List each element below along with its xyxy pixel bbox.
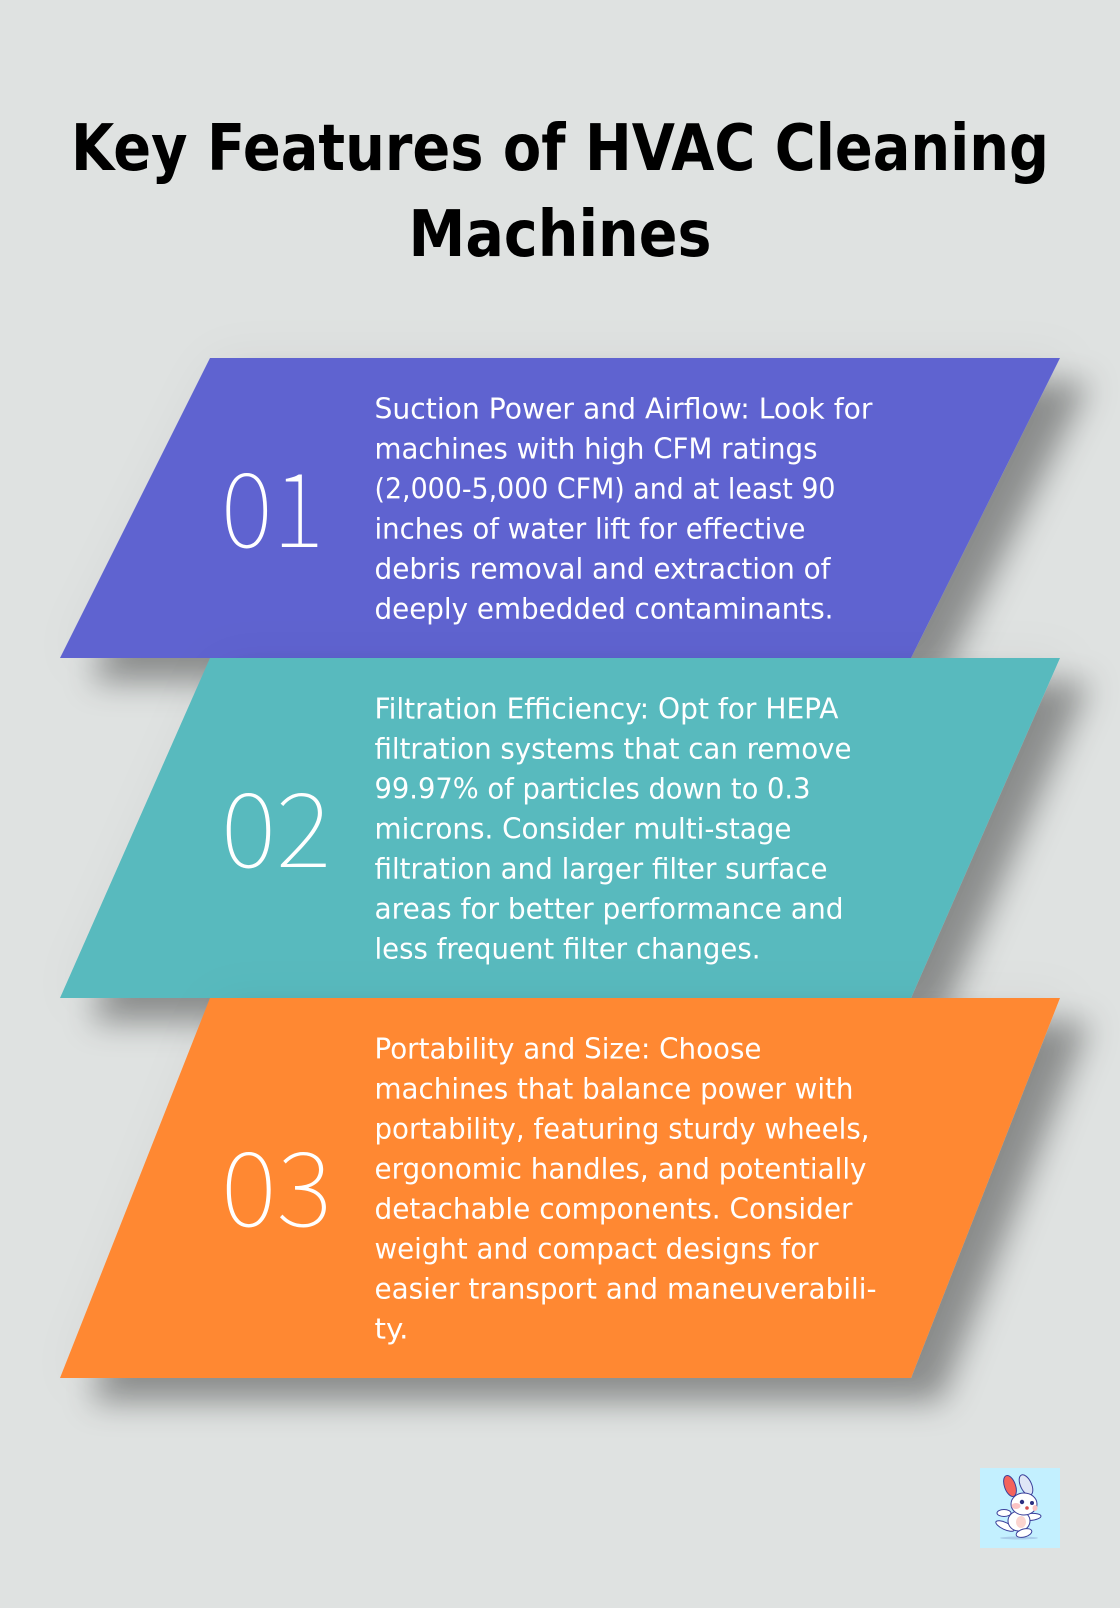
number 03: 03 [221, 1107, 332, 1256]
panel 1 text [374, 392, 873, 626]
title [71, 112, 1049, 272]
panel 1 text: deeply embedded contaminants. [374, 592, 834, 626]
panel 1: suction power and airflow [60, 358, 1060, 658]
panel 3 text [374, 1032, 876, 1346]
number 01: 01 [221, 428, 324, 577]
panel 2 text: 99.97% of particles down to 0.3 [374, 772, 810, 806]
panel 1 text: inches of water lift for effective [374, 512, 806, 546]
panel 1 shape [60, 358, 1060, 658]
panel 2 text: Filtration Efficiency: Opt for HEPA [374, 692, 839, 726]
panel 2 text: less frequent filter changes. [374, 932, 760, 966]
panel 3 text: Portability and Size: Choose [374, 1032, 762, 1066]
panel 3 text: machines that balance power with [374, 1072, 854, 1106]
panel 3 text: detachable components. Consider [374, 1192, 853, 1226]
panel 3: portability and size [60, 998, 1060, 1378]
panel 3 text: ty. [374, 1312, 408, 1346]
number 02: 02 [221, 748, 331, 897]
panel 2 shape [60, 658, 1060, 998]
panel 3 text: ergonomic handles, and potentially [374, 1152, 867, 1186]
panel 2: filtration efficiency [60, 658, 1060, 998]
panel 2 text: microns. Consider multi-stage [374, 812, 792, 846]
panel 1 text: debris removal and extraction of [374, 552, 831, 586]
panel 3 text: weight and compact designs for [374, 1232, 819, 1266]
panel 3 shape [60, 998, 1060, 1378]
panel 3 text: easier transport and maneuverabili- [374, 1272, 876, 1306]
panel 2 text: areas for better performance and [374, 892, 844, 926]
panel 2 text: filtration and larger filter surface [374, 852, 828, 886]
panel 1 text: machines with high CFM ratings [374, 432, 818, 466]
icon: rabbit logo [980, 1468, 1060, 1548]
panel 3 text: portability, featuring sturdy wheels, [374, 1112, 870, 1146]
panel 2 text [374, 692, 852, 966]
panel 1 text: (2,000-5,000 CFM) and at least 90 [374, 472, 836, 506]
title: Machines [408, 198, 712, 272]
panel 1 text: Suction Power and Airflow: Look for [374, 392, 873, 426]
panel 2 text: filtration systems that can remove [374, 732, 852, 766]
